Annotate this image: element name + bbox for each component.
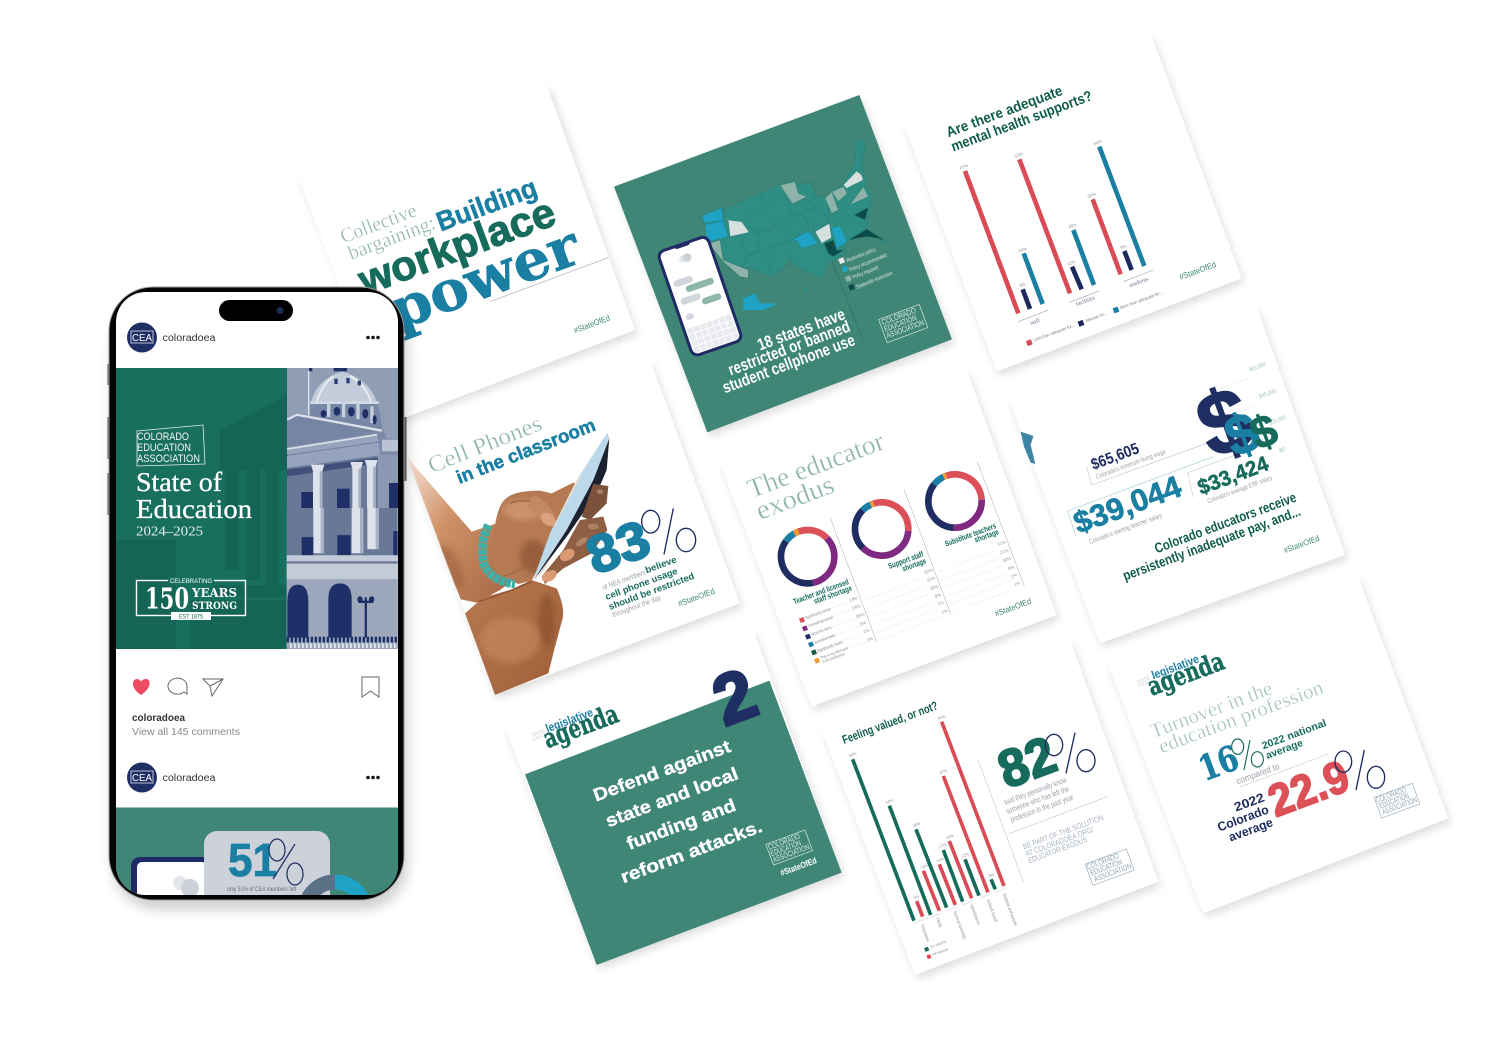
stat: 16% national: 16	[1193, 738, 1244, 790]
bar chart: 62%	[1014, 151, 1024, 159]
stat: 22.9% Colorado: 22.9	[1261, 750, 1356, 827]
agenda wordmark	[530, 699, 623, 755]
heading: feeling valued: Feeling valued, or not?	[840, 698, 940, 747]
agenda wordmark: legislative	[1149, 652, 1201, 682]
heading: adequate supports: Are there adequate	[944, 83, 1065, 141]
bar chart: 67%	[959, 163, 969, 171]
bar chart: Policymakers	[920, 924, 931, 943]
donut values: 1%	[937, 600, 944, 607]
bar chart: 54%	[1093, 139, 1103, 146]
avatar and username: second post	[127, 762, 380, 792]
stat: 16% national	[1193, 718, 1328, 790]
call to action: AT COLORADOEA.ORG/	[1024, 825, 1095, 859]
illustration: smartphone chat	[657, 235, 743, 357]
stat: ESP salary: Colorado's average ESP salary	[1207, 475, 1274, 505]
bar chart: 3%	[987, 872, 995, 879]
logo: COLORADO	[1374, 785, 1407, 805]
logo: EDUCATION	[883, 313, 918, 334]
big stat: 82%: 82	[990, 725, 1064, 800]
logo	[766, 829, 813, 865]
title: state of education: State of	[136, 467, 222, 497]
card: educator pay	[1008, 307, 1348, 648]
bar chart: 17%	[938, 842, 948, 849]
stat description: throughout the day	[611, 593, 662, 619]
donut values: 1%	[941, 608, 948, 615]
badge: 150 years strong: YEARS	[191, 586, 237, 600]
chart legend: Less than adequate for...	[1033, 323, 1075, 343]
map legend	[838, 247, 894, 291]
bar chart: 11%	[1066, 259, 1076, 267]
big stat: 83%	[579, 508, 696, 586]
bar chart: 55%	[937, 713, 947, 721]
stat description	[1003, 775, 1075, 824]
stat: 16% national: 2022 national	[1261, 718, 1328, 752]
logo: ASSOCIATION	[137, 453, 200, 465]
stat: starting salary: Colorado's starting teacher salary	[1088, 512, 1164, 546]
statement text	[590, 736, 765, 887]
icon: dollar signs: $	[1216, 400, 1268, 470]
bar chart: 5%	[913, 893, 920, 900]
bar chart: 34%	[885, 797, 894, 805]
logo: COLORADO	[767, 832, 801, 852]
heading: collective bargaining: Collective	[337, 200, 420, 248]
donut titles: Substitute teachers	[944, 521, 998, 549]
donut legend: About the same	[810, 625, 832, 637]
post image: green title panel	[116, 368, 287, 649]
card: educator pay: $0	[1279, 447, 1287, 455]
bar chart: General Assembly	[952, 910, 967, 940]
heading: collective bargaining: Building	[432, 172, 541, 237]
agenda wordmark: agenda	[1144, 647, 1229, 703]
phone mockup	[108, 287, 408, 942]
map legend: Policy recommended	[848, 253, 888, 274]
logo	[1085, 848, 1134, 885]
heading: cell phones: Cell Phones	[424, 411, 546, 479]
logo: COLORADO	[137, 431, 189, 443]
bar chart: 14%	[920, 862, 929, 870]
donut values: 1%	[1010, 572, 1018, 579]
hashtag: #StateOfEd	[1282, 533, 1321, 555]
card: mental health supports	[903, 33, 1244, 376]
logo	[137, 425, 205, 466]
agenda wordmark: 2025	[1136, 674, 1152, 689]
bar chart: Students and parents	[1002, 893, 1018, 927]
caption	[132, 714, 240, 735]
donut values: 9%	[1007, 564, 1015, 571]
chart legend	[924, 939, 949, 959]
caption: View all 145 comments	[132, 727, 240, 738]
title: state of education	[136, 471, 252, 536]
heading: turnover: Turnover in the	[1147, 678, 1276, 743]
donut legend: This is my first year	[820, 645, 849, 660]
bar chart: 35%	[1087, 191, 1097, 199]
donut: support staff	[844, 491, 919, 567]
donut values: 31%	[926, 575, 936, 583]
stat: 22.9% Colorado: Colorado	[1215, 803, 1271, 834]
bar chart: 24%	[1018, 246, 1028, 254]
donut legend: in the profession	[821, 651, 846, 664]
divider	[490, 258, 608, 302]
stat: 16% national: average	[1265, 738, 1305, 762]
chart legend: Not valued by	[931, 946, 949, 957]
donut values: 8%	[934, 592, 942, 599]
donut legend: Somewhat better	[814, 632, 837, 645]
heading: 18 states: restricted or banned	[725, 317, 853, 379]
donut values: 1%	[1013, 580, 1021, 587]
bar chart: School board	[986, 899, 999, 923]
map legend: Restrictive policy	[846, 247, 877, 264]
heading: inadequate pay: Colorado educators receive	[1152, 489, 1298, 556]
call to action: EDUCATOR-EXODUS	[1027, 835, 1088, 865]
badge: 150 years strong: 150	[145, 582, 189, 616]
donut values: 5%	[859, 620, 867, 627]
dividers	[978, 761, 1107, 882]
donut values: 1%	[863, 627, 870, 634]
donut titles: Support staff	[887, 549, 925, 571]
hashtag: #StateOfEd	[572, 312, 612, 335]
stat description: someone who has left the	[1005, 784, 1071, 816]
donut titles: Teacher and licensed	[792, 577, 850, 606]
stat boxes	[1068, 443, 1240, 537]
bar chart: students	[1129, 276, 1150, 289]
bar chart: 50%	[848, 751, 858, 758]
logo: ASSOCIATION	[772, 842, 811, 864]
heading: collective bargaining: workplace	[351, 188, 562, 304]
card: educator pay: $45,000	[1259, 388, 1277, 400]
stat: living wage: Colorado's minimum living wage	[1095, 448, 1167, 481]
bar chart	[959, 139, 1153, 327]
stat: living wage: $65,605	[1089, 440, 1142, 474]
second post: 51% panel	[116, 808, 398, 895]
second post: 51% panel: 51	[228, 834, 277, 886]
second post: 51% panel: only 51% of CEA members felt	[227, 886, 296, 893]
agenda wordmark: 2025	[530, 728, 548, 743]
post image: capitol building lower storeys	[287, 501, 398, 649]
column rules	[830, 462, 1024, 642]
avatar and username: second post: coloradoea	[162, 773, 216, 784]
donut values: 20%	[929, 584, 939, 591]
call to action	[1022, 813, 1105, 865]
donut values: 21%	[997, 539, 1007, 547]
bar chart: 9%	[1120, 243, 1127, 250]
card: collective bargaining	[298, 85, 638, 426]
title: state of education: 2024–2025	[136, 524, 203, 540]
donut titles: shortage	[901, 556, 928, 574]
donut values: 1%	[866, 636, 874, 643]
donut legend	[799, 606, 849, 664]
dynamic island	[219, 300, 293, 321]
stat description: of NEA members	[601, 567, 647, 592]
big stat: 83%: 83	[579, 509, 658, 586]
stat description	[601, 554, 696, 619]
US map	[702, 138, 887, 310]
heading: 18 states: 18 states have	[755, 305, 848, 354]
logo: EDUCATION	[1089, 857, 1124, 878]
donut legend: Significantly worse	[805, 606, 832, 620]
heading: educator exodus: exodus	[752, 469, 838, 526]
badge: 150 years strong	[136, 577, 246, 620]
card: cell phones in the classroom	[407, 360, 743, 699]
axis grid and labels	[1217, 378, 1278, 458]
agenda wordmark: agenda	[539, 699, 623, 755]
donut titles	[792, 521, 1000, 606]
stat: 22.9% Colorado	[1215, 750, 1385, 844]
hashtag: #StateOfEd	[779, 855, 818, 878]
bar chart: Family	[935, 917, 943, 929]
card: feeling valued	[822, 640, 1161, 979]
agenda wordmark: legislative	[543, 705, 595, 735]
heading: 18 states: student cellphone use	[720, 330, 858, 397]
side buttons	[108, 364, 406, 515]
badge: 150 years strong: CELEBRATING	[170, 579, 212, 585]
avatar and username: second post: CEA	[132, 773, 152, 784]
icon: dollar signs: $	[1243, 403, 1284, 460]
stat description: profession in the past year	[1009, 793, 1075, 824]
photo: hands holding phone	[407, 433, 609, 695]
bar chart: staff	[1029, 317, 1041, 327]
compared to	[1235, 754, 1328, 787]
logo: ASSOCIATION	[885, 318, 925, 340]
map fragment	[1021, 432, 1035, 464]
stat description: believe	[644, 554, 678, 575]
icon: dollar signs: $	[1184, 367, 1266, 478]
donut values: 25%	[855, 612, 865, 619]
map legend: Policy required	[852, 265, 879, 281]
bar chart: Administrators	[969, 904, 981, 926]
donut: teacher and licensed staff	[770, 519, 845, 594]
bar chart: 26%	[912, 821, 922, 828]
stat: 22.9% Colorado: average	[1227, 815, 1275, 844]
bar chart: 12%	[961, 851, 970, 859]
compared to: compared to	[1235, 761, 1281, 786]
card: the educator exodus	[720, 370, 1059, 711]
avatar and username: first post	[127, 322, 380, 352]
stat: ESP salary: $33,424	[1194, 451, 1272, 500]
stat: starting salary: $39,044	[1069, 470, 1186, 541]
logo: EDUCATION	[769, 838, 802, 858]
hashtag: #StateOfEd	[677, 586, 716, 609]
stat description: said they personally know	[1003, 775, 1068, 807]
card: educator pay: $25,000	[1269, 415, 1287, 427]
map legend: Statewide restriction	[855, 271, 894, 291]
heading: adequate supports: mental health supports?	[949, 88, 1095, 155]
statement text: funding and	[624, 795, 739, 854]
bar chart: facilities	[1075, 294, 1097, 308]
stat description: should be restricted	[607, 571, 696, 612]
logo: ASSOCIATION	[1093, 861, 1133, 884]
donut titles: staff shortage	[813, 583, 854, 606]
bar chart: 14%	[935, 856, 945, 864]
bar chart	[848, 713, 1018, 943]
donut values: 24%	[851, 603, 861, 611]
title: state of education: Education	[136, 494, 253, 524]
card: turnover in the education profession	[1108, 575, 1451, 918]
donut values: 14%	[849, 595, 859, 603]
badge: 150 years strong: EST 1875	[179, 614, 204, 620]
donut: substitute teachers	[917, 463, 993, 539]
hashtag: #StateOfEd	[1178, 259, 1218, 282]
statement text: reform attacks.	[618, 816, 765, 887]
bar chart: 9%	[1019, 281, 1026, 288]
action icons	[133, 677, 379, 697]
statement text: Defend against	[590, 736, 733, 805]
green panel	[525, 681, 842, 965]
logo: ASSOCIATION	[1381, 795, 1419, 817]
bar chart: 37%	[939, 768, 948, 775]
card: cellphone restriction map	[614, 95, 955, 437]
heading: cell phones: in the classroom	[453, 414, 598, 488]
card: educator pay: $65,000	[1249, 362, 1267, 374]
stat: 22.9% Colorado: 2022	[1232, 790, 1266, 814]
heading: collective bargaining: power	[380, 212, 590, 343]
phone body	[109, 287, 404, 900]
logo: COLORADO	[880, 306, 917, 327]
chart legend: Yes, valued by	[929, 939, 947, 949]
donut values: 32%	[924, 567, 934, 575]
heading: collective bargaining: bargaining:	[345, 212, 438, 265]
heading: inadequate pay: persistently inadequate pay, and...	[1120, 503, 1303, 583]
stat description: cell phone usage	[604, 566, 679, 602]
hashtag: #StateOfEd	[993, 596, 1033, 619]
chart legend	[1026, 290, 1163, 346]
donut values: 21%	[999, 548, 1009, 555]
logo: EDUCATION	[1378, 791, 1411, 811]
heading: educator exodus: The educator	[743, 426, 888, 504]
donut legend: Significantly better	[816, 639, 844, 654]
card: legislative agenda item 2	[504, 630, 844, 969]
chart legend: Adequate for...	[1085, 311, 1107, 323]
donut values: 30%	[1002, 556, 1012, 563]
donut titles: shortage	[973, 527, 1000, 545]
bar chart: 16%	[945, 833, 955, 840]
bar chart: 28%	[1067, 222, 1077, 230]
logo	[878, 304, 928, 343]
phone screen	[116, 292, 399, 942]
chart legend: More than adequate for...	[1119, 290, 1163, 310]
donut legend: Somewhat worse	[808, 614, 834, 628]
heading: turnover: education profession	[1156, 677, 1327, 758]
donut values	[849, 539, 1021, 643]
logo: EDUCATION	[137, 442, 191, 454]
avatar and username: first post: CEA	[132, 333, 152, 344]
call to action: BE PART OF THE SOLUTION	[1022, 813, 1105, 851]
caption: coloradoea	[132, 713, 185, 724]
heading: collective bargaining	[337, 172, 590, 343]
statement text: state and local	[603, 764, 741, 831]
logo	[1374, 782, 1420, 818]
post image: capitol dome and pediment	[287, 368, 399, 508]
numeral 2: 2	[702, 653, 767, 741]
badge: 150 years strong: STRONG	[192, 600, 237, 612]
agenda wordmark	[1136, 647, 1229, 703]
logo: COLORADO	[1085, 851, 1120, 871]
avatar and username: first post: coloradoea	[162, 333, 216, 344]
